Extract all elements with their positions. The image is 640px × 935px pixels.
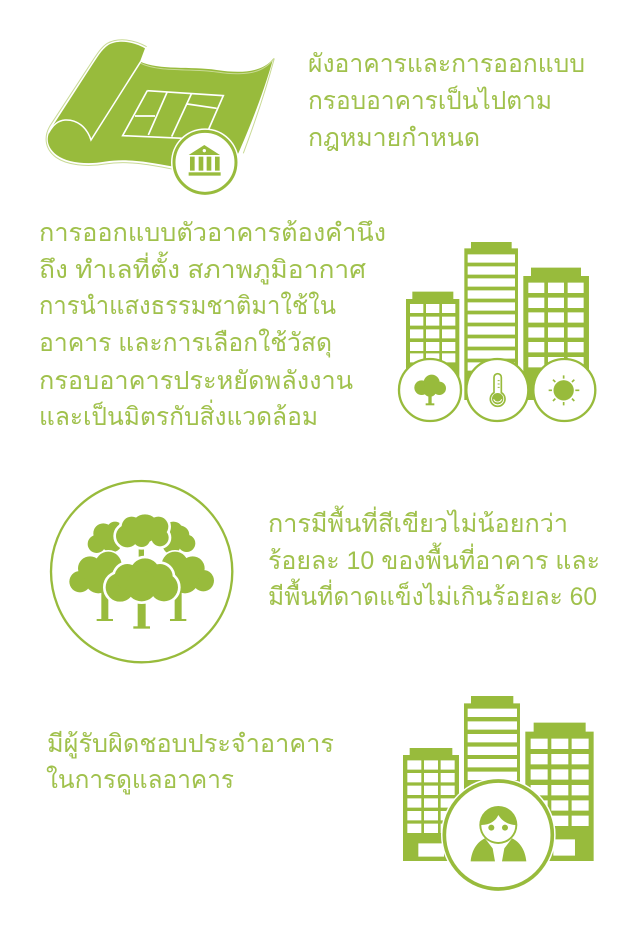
text: building design considerations: การออกแบบตัวอาคารต้องคำนึง bbox=[39, 219, 386, 247]
circle outline bbox=[51, 481, 232, 662]
right building bbox=[523, 268, 589, 400]
text: green area requirement: มีพื้นที่ดาดแข็งไม่เกินร้อยละ 60 bbox=[268, 578, 597, 611]
text: building manager: มีผู้รับผิดชอบประจำอาคาร bbox=[47, 730, 334, 759]
text: building design considerations: และเป็นมิตรกับสิ่งแวดล้อม bbox=[39, 399, 318, 431]
icon: blueprint roll with building badge bbox=[46, 40, 274, 196]
text: blueprint and building envelope: ผังอาคารและการออกแบบ bbox=[308, 50, 585, 78]
blueprint paper bbox=[48, 42, 273, 167]
text: building design considerations: อาคาร และการเลือกใช้วัสดุ bbox=[39, 328, 332, 358]
floor plan bbox=[123, 91, 223, 138]
badge ring bbox=[444, 781, 552, 889]
text: building design considerations: กรอบอาคารประหยัดพลังงาน bbox=[39, 367, 353, 395]
text: green area requirement bbox=[268, 505, 600, 611]
text: blueprint and building envelope: กรอบอาคารเป็นไปตาม bbox=[308, 85, 552, 115]
middle tree trunks bbox=[97, 590, 186, 621]
blueprint roll outline bbox=[46, 40, 274, 169]
icon: person bbox=[471, 806, 526, 861]
top tree bbox=[116, 514, 169, 560]
text: green area requirement: การมีพื้นที่สีเขียวไม่น้อยกว่า bbox=[268, 505, 568, 538]
badge ring bbox=[174, 131, 236, 193]
text: blueprint and building envelope: กฎหมายกำหนด bbox=[308, 124, 480, 152]
middle right tree canopy bbox=[156, 552, 214, 593]
text: building manager: ในการดูแลอาคาร bbox=[46, 765, 234, 795]
icon: thermometer bbox=[490, 374, 505, 406]
icon: bank building bbox=[189, 145, 221, 176]
badge circle bbox=[441, 778, 556, 892]
left building bbox=[403, 748, 459, 861]
middle left tree canopy bbox=[69, 552, 128, 593]
icon: buildings with person badge bbox=[403, 696, 594, 892]
badge circle bbox=[171, 128, 239, 196]
temperature badge bbox=[466, 359, 528, 421]
text: building manager bbox=[46, 730, 334, 795]
icon: trees in circle bbox=[51, 481, 232, 662]
icon: sun bbox=[549, 375, 579, 405]
right building bbox=[525, 723, 594, 861]
back trees bbox=[88, 522, 195, 554]
roll fold line bbox=[48, 62, 141, 140]
text: blueprint and building envelope bbox=[308, 50, 585, 152]
center building bbox=[464, 242, 518, 400]
tree badge bbox=[399, 359, 461, 421]
text: building design considerations: ถึง ทำเลที่ตั้ง สภาพภูมิอากาศ bbox=[39, 251, 366, 285]
sun badge bbox=[533, 359, 595, 421]
text: building design considerations bbox=[39, 219, 386, 431]
text: building design considerations: การนำแสงธรรมชาติมาใช้ใน bbox=[39, 291, 336, 320]
icon: tree bbox=[414, 375, 446, 405]
center building bbox=[464, 696, 520, 861]
text: green area requirement: ร้อยละ 10 ของพื้นที่อาคาร และ bbox=[268, 542, 600, 575]
icon: buildings with climate badges bbox=[399, 242, 595, 421]
front tree bbox=[106, 558, 178, 629]
left building bbox=[406, 292, 459, 400]
